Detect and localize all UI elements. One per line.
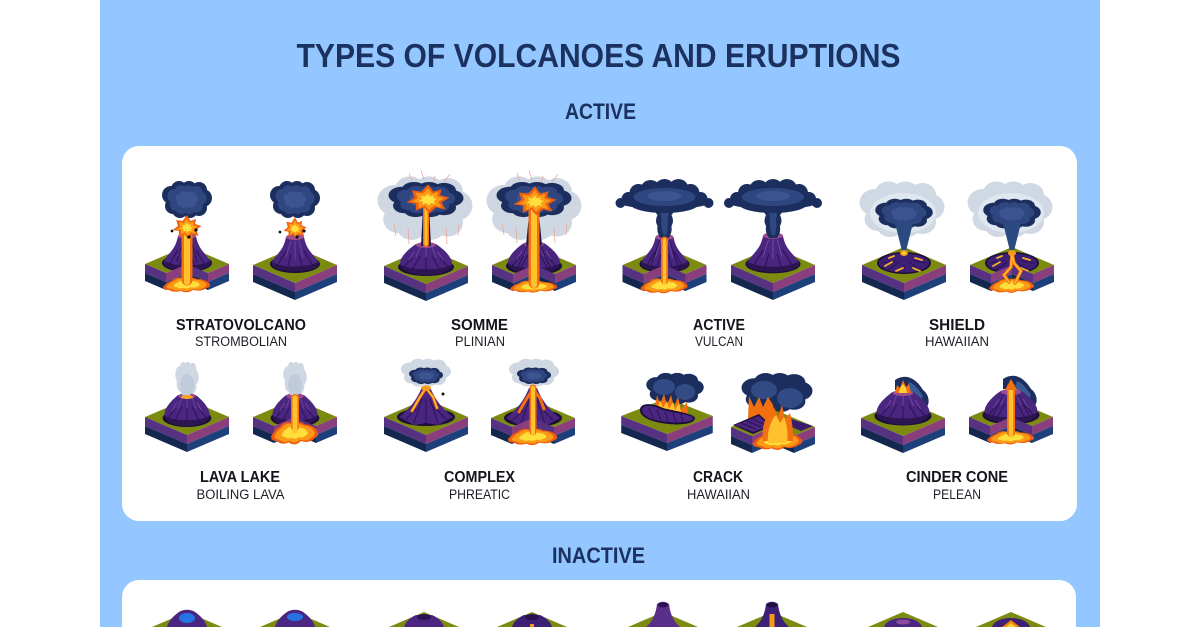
volcano: shield cutaway <box>968 182 1054 293</box>
label: complex <box>444 469 515 502</box>
volcano: inactive crater lake exterior <box>152 610 222 627</box>
label: shield: SHIELD <box>929 317 985 334</box>
label: somme <box>451 317 508 349</box>
label: stratovolcano: STROMBOLIAN <box>195 334 287 349</box>
crack card <box>621 373 815 502</box>
volcano: cinder cone cutaway <box>969 376 1053 444</box>
label: active: VULCAN <box>695 334 743 349</box>
volcano: lava lake cutaway <box>253 362 337 444</box>
stratovolcano card <box>145 181 337 349</box>
panel background <box>122 146 1077 521</box>
label: stratovolcano: STRATOVOLCANO <box>176 317 306 334</box>
volcano: inactive peak exterior <box>628 602 698 627</box>
volcano: stratovolcano cutaway <box>145 181 229 292</box>
volcano: inactive crater lake cutaway <box>260 610 330 627</box>
active card <box>616 179 822 349</box>
label: cinder cone: CINDER CONE <box>906 469 1008 486</box>
label: complex: COMPLEX <box>444 469 515 486</box>
volcano: crack exterior <box>621 373 713 451</box>
volcano: cinder cone exterior <box>861 377 945 453</box>
label: shield <box>925 317 989 349</box>
volcano: inactive peak cutaway <box>737 602 807 627</box>
volcano: shield exterior <box>860 182 946 300</box>
volcano: lava lake exterior <box>145 362 229 452</box>
volcano: inactive dome cutaway <box>497 612 567 627</box>
label: cinder cone <box>906 469 1008 502</box>
label: active <box>693 317 745 349</box>
label: somme: SOMME <box>451 317 508 334</box>
label: cinder cone: PELEAN <box>933 487 981 502</box>
label: lava lake: BOILING LAVA <box>196 487 284 502</box>
volcano: crack cutaway <box>731 373 815 453</box>
label: shield: HAWAIIAN <box>925 334 989 349</box>
title: TYPES OF VOLCANOES AND ERUPTIONS <box>296 37 900 74</box>
label: active: ACTIVE <box>693 317 745 334</box>
cinder cone card <box>861 376 1053 502</box>
label: lava lake <box>196 469 284 502</box>
volcano: somme cutaway <box>486 170 582 293</box>
volcano: active cutaway <box>616 179 714 293</box>
panel: inactive volcanoes <box>122 580 1076 627</box>
heading: active: ACTIVE <box>565 99 636 124</box>
volcano: complex exterior <box>384 359 468 452</box>
label: crack: CRACK <box>693 469 743 486</box>
panel background <box>122 580 1076 627</box>
label: lava lake: LAVA LAKE <box>200 469 280 486</box>
heading: inactive: INACTIVE <box>552 543 645 568</box>
volcano: somme exterior <box>378 170 472 301</box>
label: crack <box>687 469 750 502</box>
volcano: inactive shield cutaway <box>976 612 1046 627</box>
label: complex: PHREATIC <box>449 487 510 502</box>
volcano: inactive dome exterior <box>389 612 459 627</box>
volcano: stratovolcano exterior <box>253 181 337 300</box>
shield card <box>860 182 1054 349</box>
label: stratovolcano <box>176 317 306 349</box>
somme card <box>378 170 582 349</box>
lava lake card <box>145 362 337 502</box>
volcano: inactive shield exterior <box>868 612 938 627</box>
label: somme: PLINIAN <box>455 334 505 349</box>
volcano: active exterior <box>724 179 822 300</box>
label: crack: HAWAIIAN <box>687 487 750 502</box>
volcano: complex cutaway <box>491 359 575 445</box>
complex card <box>384 359 575 502</box>
panel: active volcanoes <box>122 146 1077 521</box>
